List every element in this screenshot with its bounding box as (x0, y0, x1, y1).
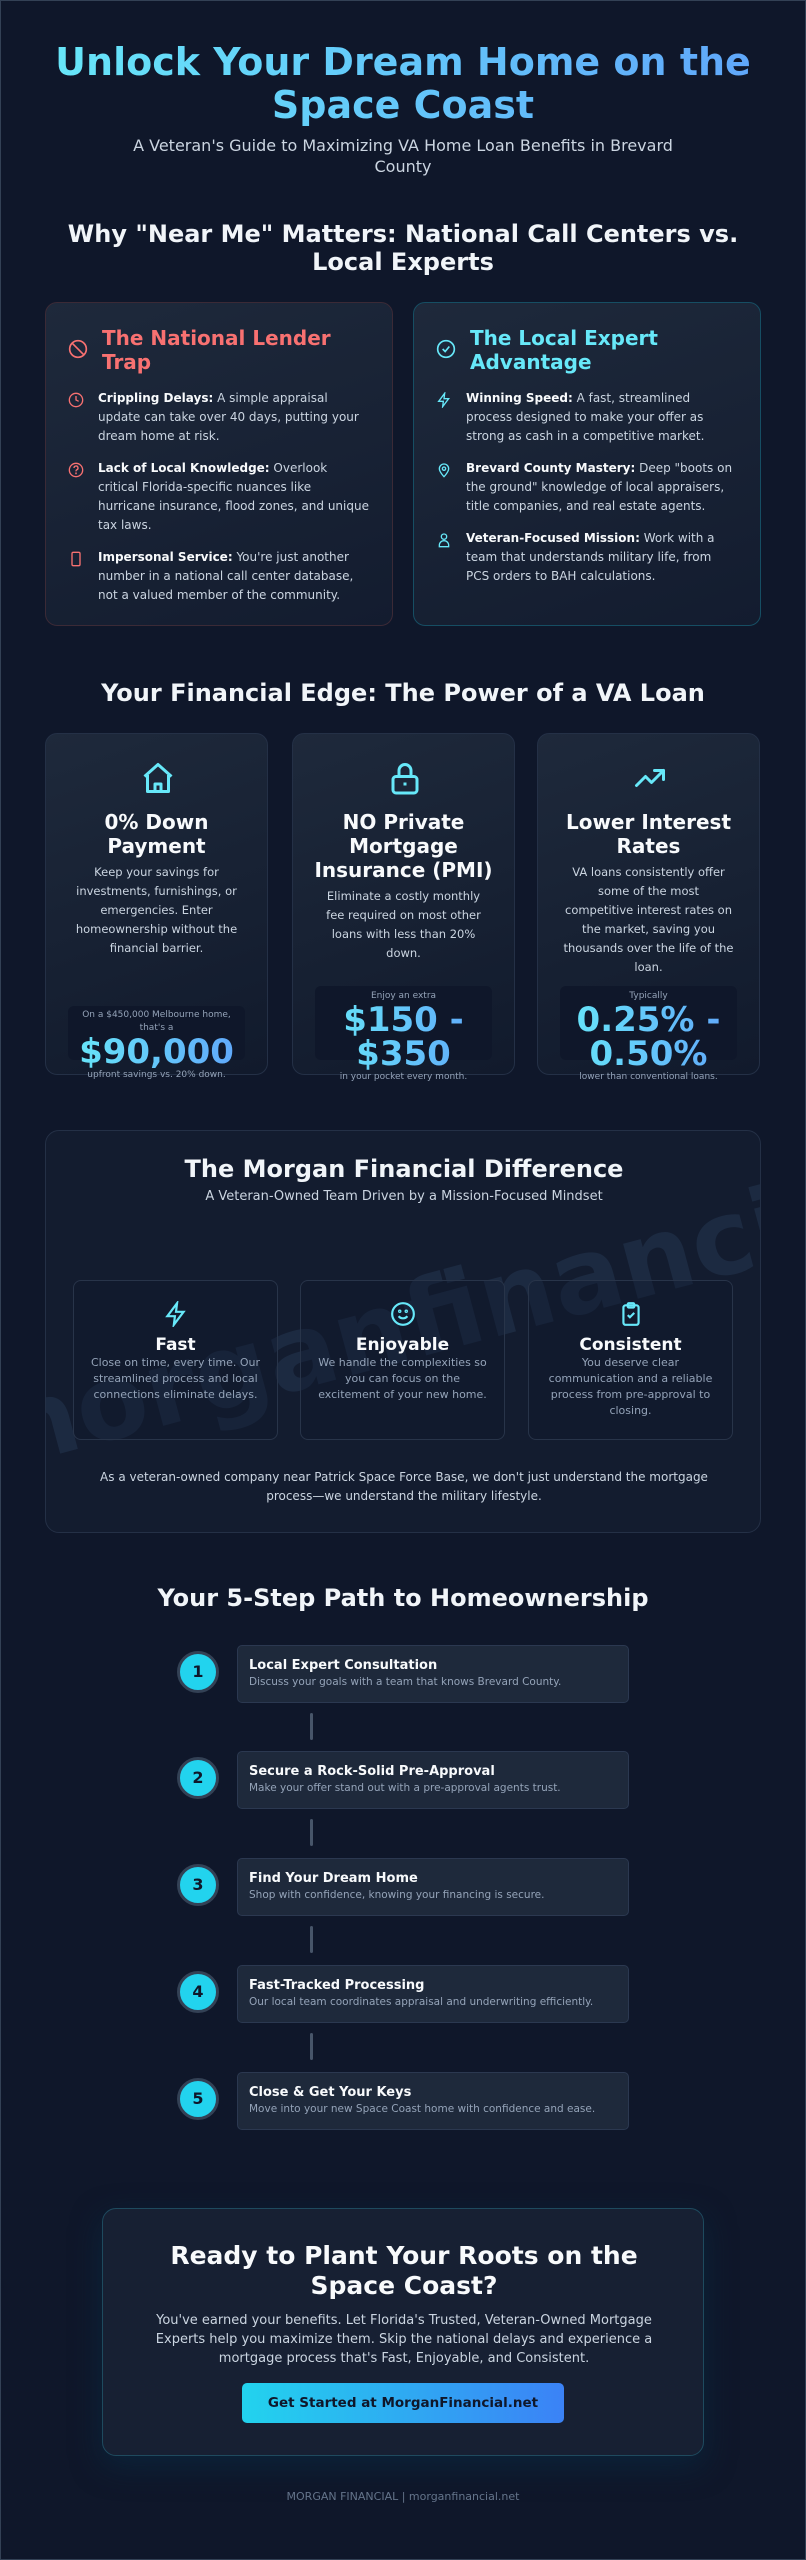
card: enjoyable: Enjoyable (356, 1335, 449, 1355)
item: delays: update can take over 40 days, putting your (98, 410, 359, 424)
cta heading: Ready to Plant Your Roots on the (170, 2241, 638, 2270)
heading: national: The National Lender (102, 326, 331, 350)
item: speed: Winning Speed: A fast, streamlined (466, 391, 690, 405)
item: speed (437, 391, 704, 443)
text: in your pocket every month. (340, 1072, 467, 1082)
stat: rates (560, 986, 737, 1060)
text: 4 (192, 1982, 204, 2001)
text: Our local team coordinates appraisal and underwriting efficiently. (249, 1996, 593, 2008)
panel: CTA (102, 2208, 704, 2456)
card: 0% down: Keep your savings for investments, furnishings, or emergencies. Enter homeownership without the financial barrier. (76, 865, 237, 955)
heading: financial edge: Your Financial Edge: The Power of a VA Loan (101, 679, 705, 707)
text: Local Expert Consultation (249, 1658, 437, 1673)
card: no PMI: Eliminate a costly monthly fee required on most other loans with less than 20% down. (326, 889, 481, 960)
card: no PMI: Mortgage (349, 834, 458, 858)
text: Find Your Dream Home (249, 1871, 418, 1886)
cta heading (170, 2241, 638, 2300)
item: mastery: Brevard County Mastery: Deep "boots on (466, 461, 732, 475)
item: delays: Crippling Delays: A simple appraisal (98, 391, 328, 405)
item: delays: dream home at risk. (98, 429, 220, 443)
text: Close & Get Your Keys (249, 2085, 411, 2100)
item: veteran: team that understands military life, from (466, 550, 711, 564)
text: Move into your new Space Coast home with confidence and ease. (249, 2103, 595, 2115)
step 1 (177, 1645, 629, 1703)
text: 2 (192, 1768, 204, 1787)
card: consistent: You deserve clear communication and a reliable process from pre-approval to closing. (549, 1356, 712, 1417)
icon: check (436, 340, 456, 358)
closing text: As a veteran-owned company near Patrick Space Force Base, we don't just understand the mortgage process—we understand the military lifestyle. (100, 1470, 708, 1503)
item: mastery: title companies, and real estate agents. (466, 499, 705, 513)
item: knowledge: hurricane insurance, flood zones, and unique (98, 499, 369, 513)
step 4 (177, 1965, 629, 2023)
card: fast: Close on time, every time. Our streamlined process and local connections eliminate delays. (91, 1356, 260, 1401)
panel: national lender trap (45, 302, 393, 626)
card: lower rates (537, 733, 760, 1075)
text: 3 (192, 1875, 204, 1894)
item: impersonal: number in a national call center database, (98, 569, 353, 583)
item: mastery (438, 461, 732, 513)
heading: local (470, 326, 658, 374)
icon: trending up (634, 768, 665, 788)
stat: rates: 0.50% (590, 1034, 707, 1074)
item: knowledge: critical Florida-specific nuances like (98, 480, 311, 494)
item: speed: process designed to make your offer as (466, 410, 703, 424)
heading: steps: Your 5-Step Path to Homeownership (157, 1584, 649, 1612)
card: consistent (528, 1280, 733, 1440)
button: Get Started at MorganFinancial.net (268, 2395, 538, 2411)
card: no PMI: NO Private (343, 810, 464, 834)
subtitle: A Veteran's Guide to Maximizing VA Home Loan Benefits in Brevard County (133, 136, 673, 176)
card: enjoyable: We handle the complexities so you can focus on the excitement of your new home. (318, 1356, 487, 1401)
text: Discuss your goals with a team that knows Brevard County. (249, 1676, 561, 1688)
step 5 (177, 2072, 629, 2130)
button (242, 2383, 564, 2423)
item: knowledge: tax laws. (98, 518, 152, 532)
icon: lock (392, 763, 418, 794)
title: Unlock Your Dream Home on the Space Coast (55, 40, 751, 127)
heading: local: The Local Expert (470, 326, 658, 350)
card: 0% down (45, 733, 268, 1075)
card: 0% down: Payment (107, 834, 206, 858)
heading: national (102, 326, 331, 374)
stat: 150-350: $150 - (343, 1000, 464, 1040)
heading: local: Advantage (470, 350, 592, 374)
text: lower than conventional loans. (579, 1072, 718, 1082)
stat: 150-350 (315, 986, 492, 1060)
heading: near me: Why "Near Me" Matters: National Call Centers vs. Local Experts (68, 220, 738, 276)
text: Shop with confidence, knowing your financing is secure. (249, 1889, 544, 1901)
item: delays (68, 391, 359, 443)
stat: 150-350: Enjoy an extra (371, 991, 436, 1001)
item: veteran: PCS orders to BAH calculations. (466, 569, 655, 583)
icon: house (144, 762, 172, 793)
card: consistent: Consistent (579, 1335, 682, 1355)
stat: rates: 0.25% - (577, 1000, 720, 1040)
icon: ban (68, 340, 88, 358)
cta heading: Space Coast? (310, 2271, 497, 2300)
item: knowledge (68, 461, 369, 532)
step 2 (177, 1751, 629, 1809)
card: lower rates: Rates (617, 834, 680, 858)
card: 0% down: upfront savings vs. 20% down. (87, 1070, 226, 1080)
panel: morgan difference (45, 1130, 761, 1533)
card: enjoyable (300, 1280, 505, 1440)
item: impersonal: not a valued member of the community. (98, 588, 340, 602)
item: speed: strong as cash in a competitive market. (466, 429, 704, 443)
card: 0% down: 0% Down (104, 810, 208, 834)
item: knowledge: Lack of Local Knowledge: Overlook (98, 461, 327, 475)
panel: local expert advantage (413, 302, 761, 626)
card: fast: Fast (155, 1335, 196, 1355)
step 3 (177, 1858, 629, 1916)
card: no PMI: Insurance (PMI) (314, 858, 493, 882)
item: mastery: the ground" knowledge of local appraisers, (466, 480, 724, 494)
text: Fast-Tracked Processing (249, 1978, 424, 1993)
card: lower rates: Lower Interest (566, 810, 731, 834)
text: Make your offer stand out with a pre-approval agents trust. (249, 1782, 561, 1794)
footer: MORGAN FINANCIAL | morganfinancial.net (287, 2490, 519, 2503)
item: impersonal (71, 550, 353, 602)
cta text: You've earned your benefits. Let Florida's Trusted, Veteran-Owned Mortgage Experts help you maximize them. Skip the national delays and experience a mortgage process that's Fast, Enjoyable, and Consistent. (156, 2313, 652, 2366)
stat: 90000 (68, 1006, 245, 1060)
card: lower rates: VA loans consistently offer some of the most competitive interest rates on the market, saving you thousands over the life of the loan. (563, 865, 734, 974)
stat: rates: Typically (629, 991, 668, 1001)
item: impersonal: Impersonal Service: You're just another (98, 550, 349, 564)
item: veteran (438, 531, 715, 583)
text: 5 (192, 2089, 204, 2108)
subheading: A Veteran-Owned Team Driven by a Mission-Focused Mindset (205, 1189, 603, 1204)
stat: 150-350: $350 (356, 1034, 451, 1074)
stat: 90000: $90,000 (79, 1032, 234, 1072)
text: 1 (192, 1662, 204, 1681)
heading: national: Trap (102, 350, 151, 374)
card: no PMI (292, 733, 515, 1075)
card: fast (73, 1280, 278, 1440)
stat: 90000: On a $450,000 Melbourne home, that's a (82, 1010, 231, 1033)
heading: morgan: The Morgan Financial Difference (185, 1155, 623, 1183)
text: Secure a Rock-Solid Pre-Approval (249, 1764, 495, 1779)
item: veteran: Veteran-Focused Mission: Work with a (466, 531, 715, 545)
